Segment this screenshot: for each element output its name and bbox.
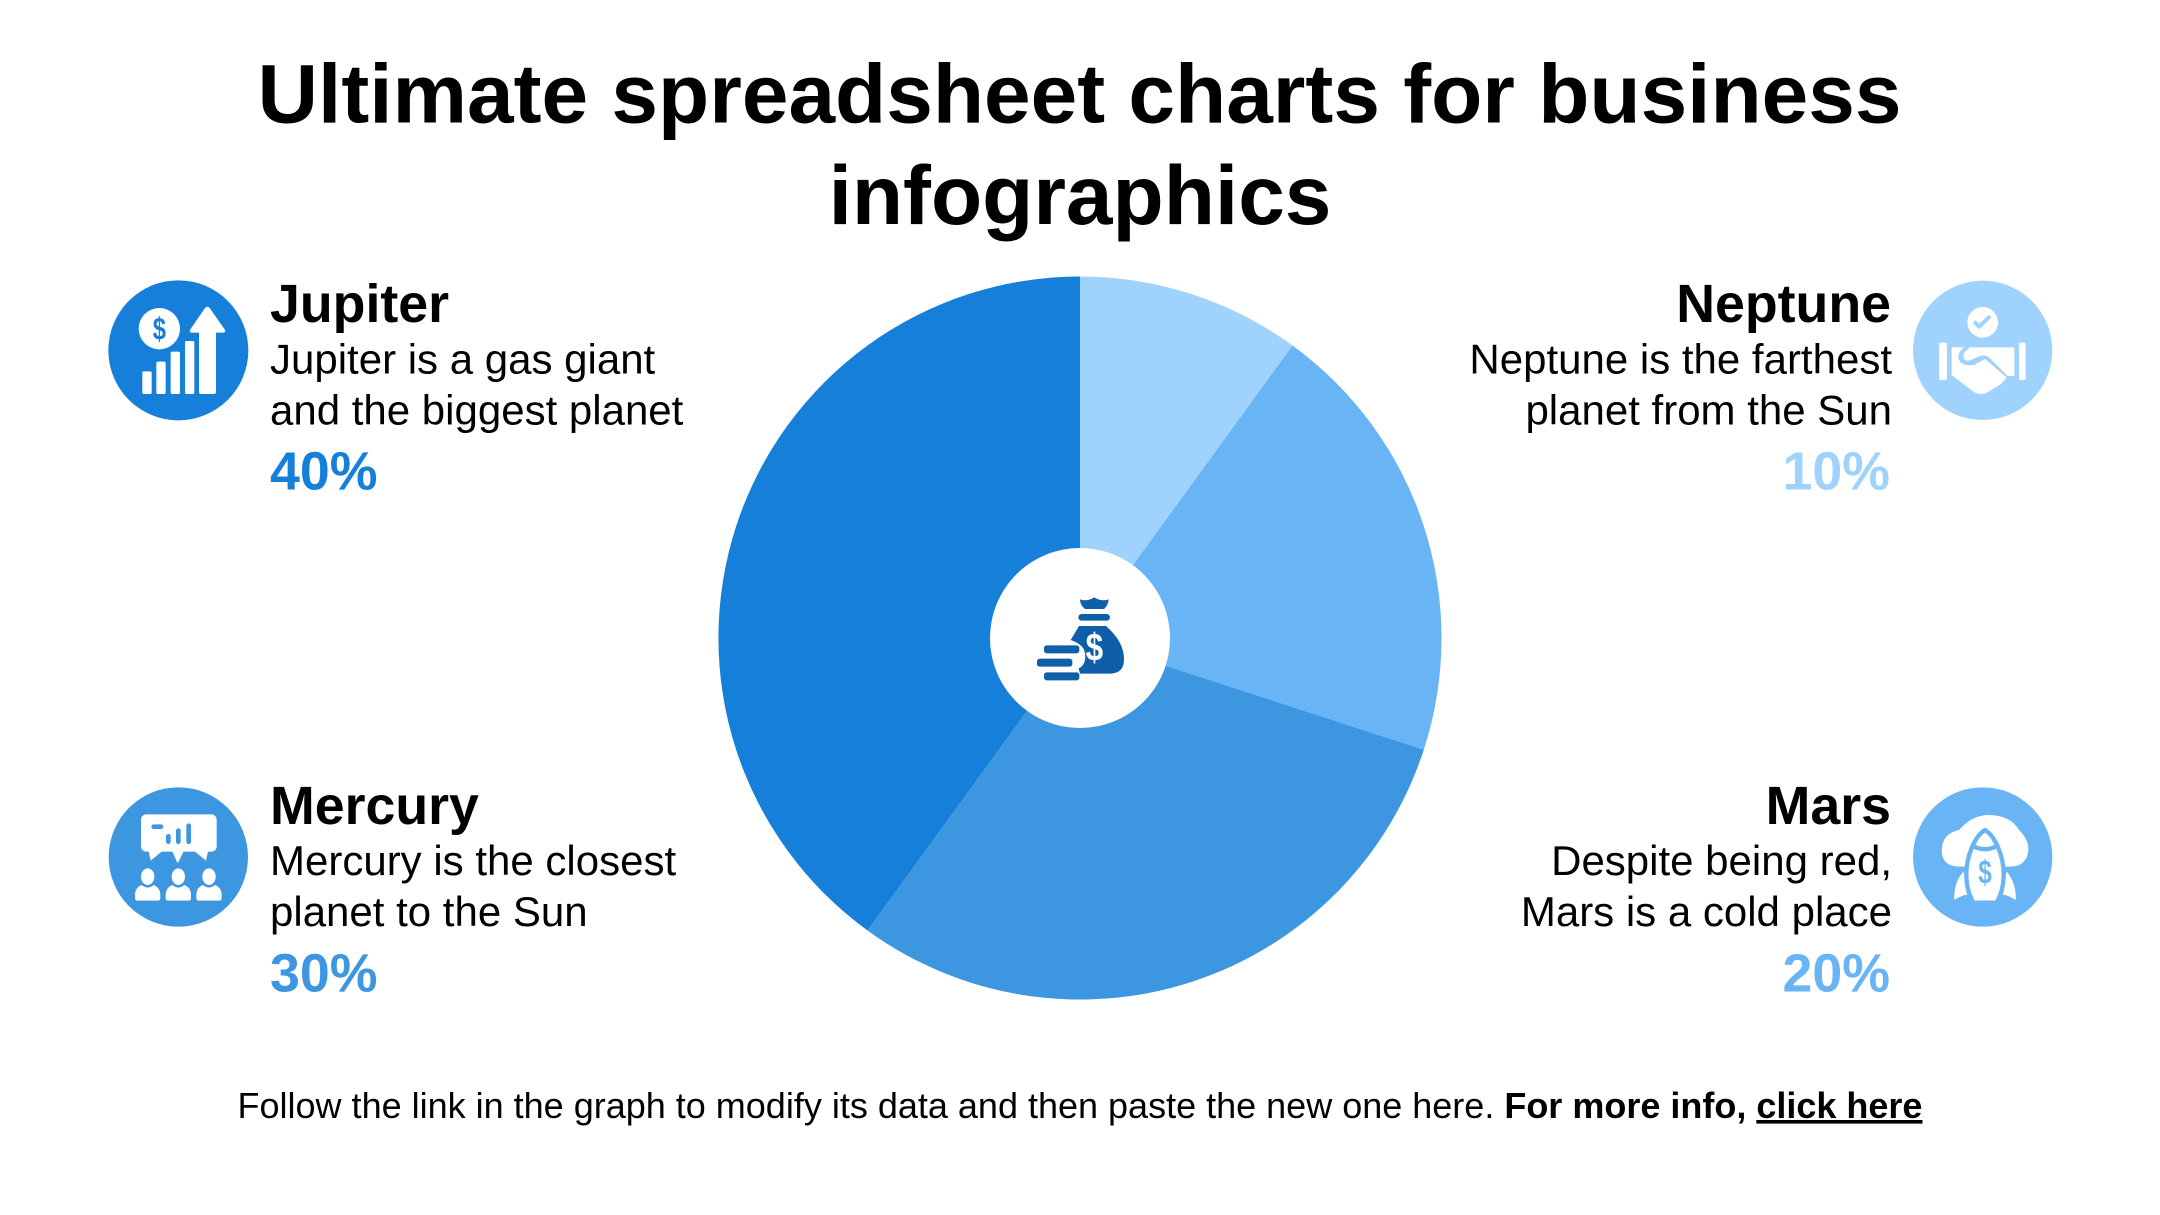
percentage: 10% [1783,442,1890,502]
center circle with money bag icon [990,548,1170,728]
percentage: 40% [270,442,377,502]
icon: growth chart [108,280,248,420]
description [270,336,684,434]
description: planet to the Sun [270,888,588,935]
panel: Mars [1521,776,2052,1004]
slice: Mars 20% [1080,346,1442,750]
heading: Neptune [1676,274,1891,334]
description [270,837,676,935]
description: Jupiter is a gas giant [270,336,656,382]
icon: handshake [1913,281,2052,420]
icon: audience and presentation [109,787,248,927]
slice: Neptune 10% [1080,276,1292,638]
panel: Neptune [1469,274,2052,502]
description: Despite being red, [1551,837,1892,884]
percentage: 30% [270,944,377,1004]
title [258,46,1901,242]
percentage: 20% [1783,944,1890,1004]
description [1469,336,1892,434]
footer note: Follow the link in the graph to modify its data and then paste the new one here. For more info, click here [238,1085,1922,1126]
description: Mars is a cold place [1521,888,1892,935]
title: infographics [829,148,1331,242]
heading: Jupiter [270,274,449,334]
panel: Mercury [109,776,676,1004]
description: planet from the Sun [1525,386,1892,434]
pie chart [718,276,1442,1000]
heading: Mercury [270,776,479,836]
center circle with money bag icon: $ [1086,625,1103,669]
description [1521,837,1892,935]
heading: Mars [1766,776,1891,836]
description: Mercury is the closest [270,837,676,884]
description: and the biggest planet [270,386,684,434]
slice: Mercury 30% [868,638,1424,1000]
title: Ultimate spreadsheet charts for business [258,46,1901,140]
icon: rocket and cloud: $ [1978,855,1992,891]
slice: Jupiter 40% [718,276,1080,930]
icon: rocket and cloud [1913,787,2052,927]
icon: growth chart: $ [153,311,166,346]
panel: Jupiter [108,274,684,502]
description: Neptune is the farthest [1469,336,1892,382]
